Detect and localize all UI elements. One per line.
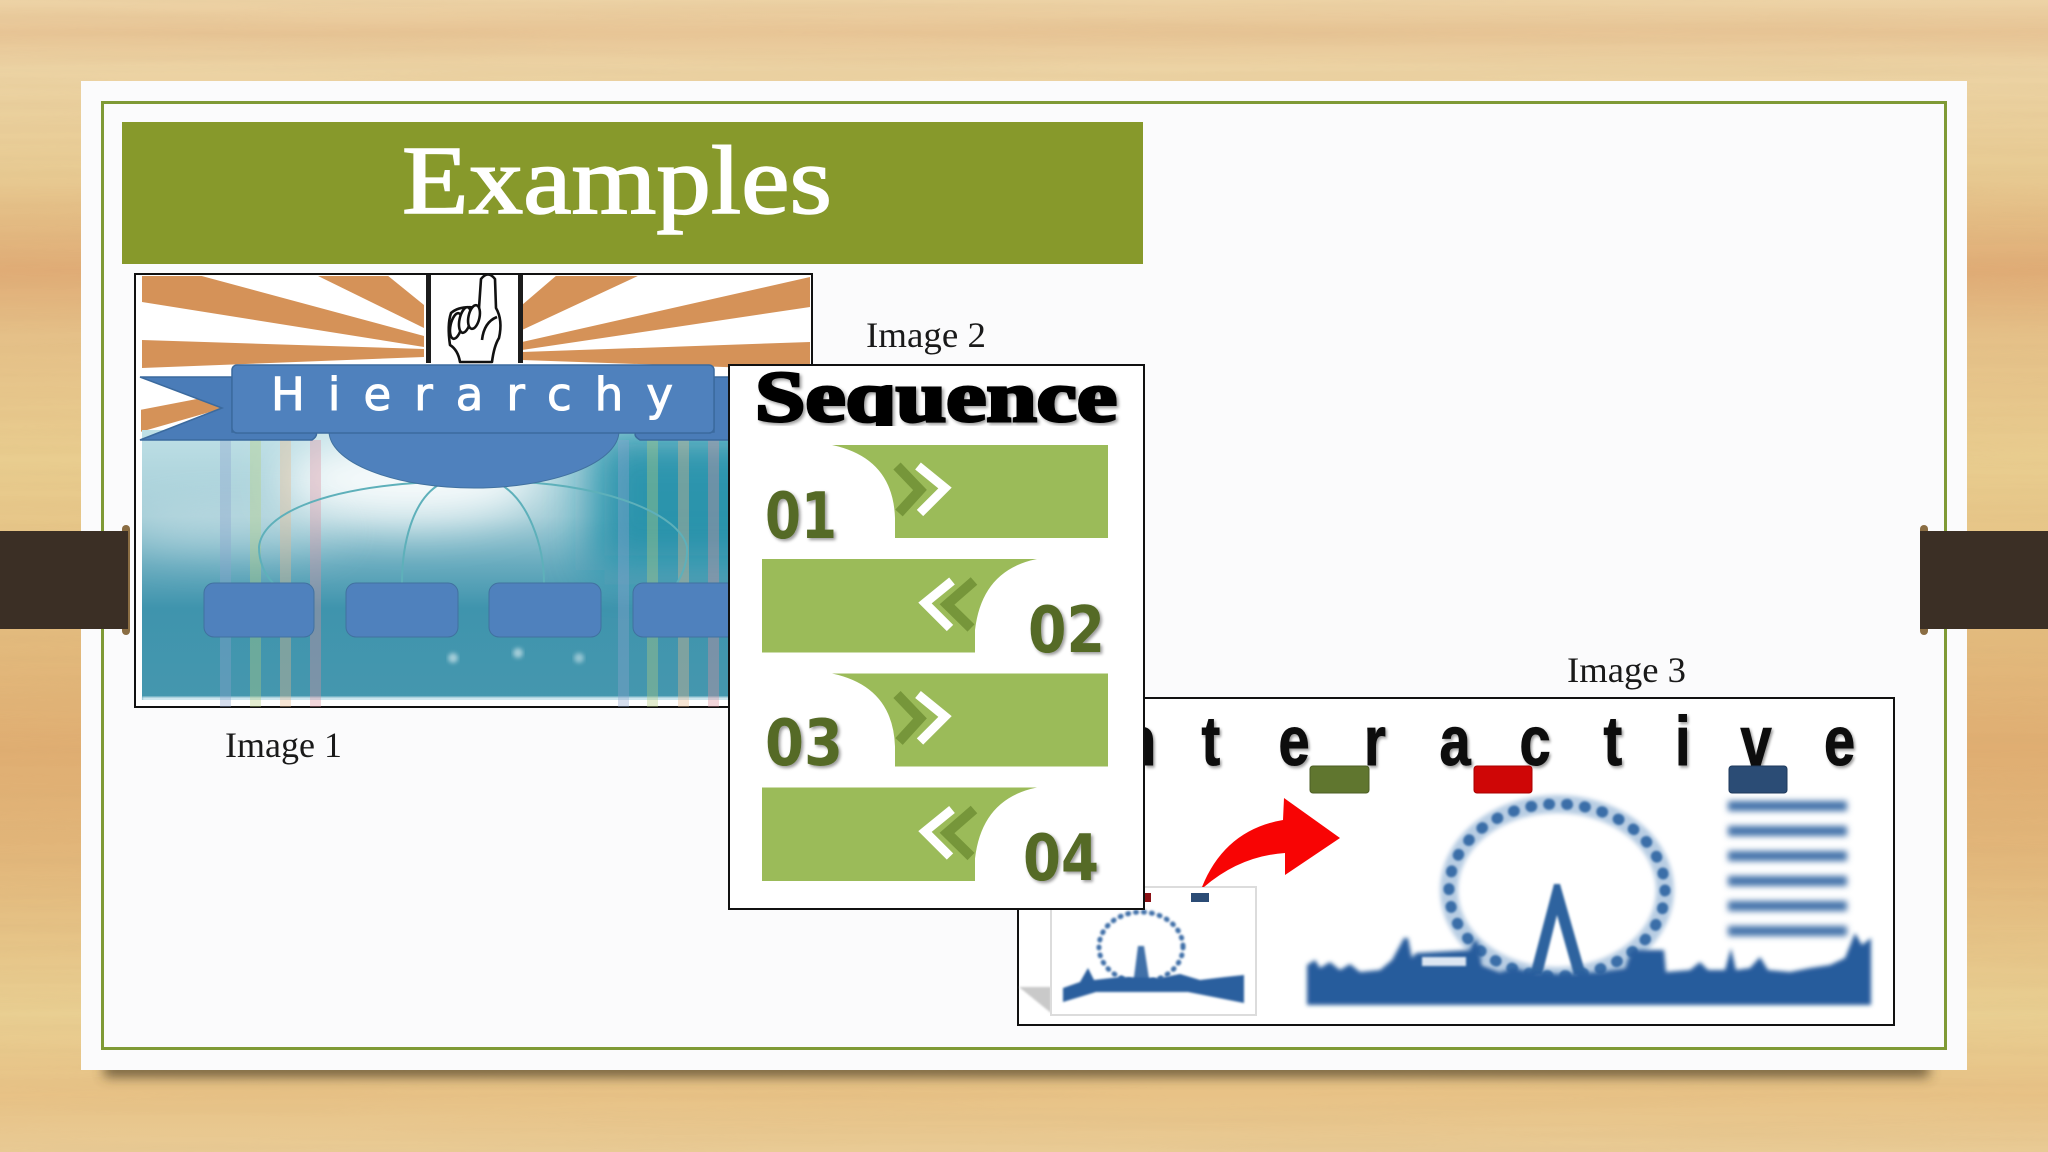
step 03: 03 bbox=[765, 707, 843, 781]
icon: pointing hand bbox=[448, 274, 500, 362]
step 01 bbox=[765, 445, 1108, 554]
right strap bbox=[1920, 525, 2048, 635]
panel: image 2 sequence bbox=[729, 357, 1144, 909]
vertical stripes bbox=[220, 440, 719, 707]
panel: image 1 hierarchy bbox=[125, 274, 820, 707]
panel: image 3 interactive bbox=[1018, 698, 1894, 1025]
navy button bbox=[1729, 766, 1787, 793]
title banner bbox=[122, 122, 1143, 264]
caption: image 2: Image 2 bbox=[866, 315, 986, 355]
caption: image 3: Image 3 bbox=[1567, 650, 1686, 690]
blurred menu lines bbox=[1728, 801, 1847, 936]
title: Examples bbox=[402, 127, 832, 235]
big skyline bbox=[1307, 933, 1871, 1005]
step 02 bbox=[762, 559, 1105, 668]
sunburst rays bbox=[140, 275, 810, 432]
slide drop shadow bbox=[104, 1062, 1929, 1077]
connector curves bbox=[259, 482, 687, 583]
green button bbox=[1310, 766, 1369, 793]
sky background bbox=[141, 430, 728, 700]
ferris wheel bbox=[1449, 804, 1665, 976]
step 04: 04 bbox=[1023, 822, 1099, 896]
paper slide bbox=[81, 81, 1967, 1070]
step 03 bbox=[765, 674, 1108, 781]
left strap bbox=[0, 525, 130, 635]
interactive word: nteractive bbox=[1122, 703, 1855, 780]
ribbon bbox=[140, 365, 745, 440]
thumbnail bbox=[1019, 887, 1256, 1015]
ribbon label: Hierarchy bbox=[271, 368, 673, 421]
ribbon dome bbox=[329, 374, 619, 488]
hand icon box bbox=[426, 274, 523, 363]
step 04 bbox=[762, 788, 1099, 896]
red curved arrow bbox=[1202, 798, 1340, 887]
step 02: 02 bbox=[1028, 594, 1105, 668]
org chart boxes bbox=[204, 583, 743, 637]
step 01: 01 bbox=[765, 480, 837, 554]
red button bbox=[1474, 766, 1532, 793]
green inner border bbox=[102, 102, 1946, 1048]
sequence heading: Sequence bbox=[755, 357, 1117, 437]
caption: image 1: Image 1 bbox=[225, 725, 342, 765]
